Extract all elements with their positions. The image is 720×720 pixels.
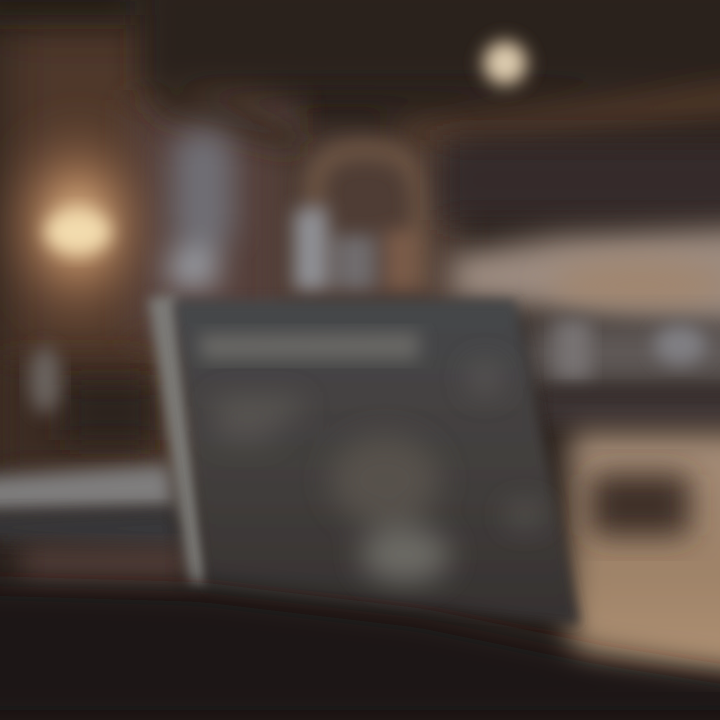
ceiling beams: [0, 0, 720, 150]
tablet: [148, 294, 580, 625]
right side scene: [440, 140, 720, 680]
blurred text lines on screen: [215, 362, 543, 583]
blurred heading on screen: [198, 332, 420, 360]
ceiling lamp: [469, 27, 541, 99]
dark wall band: [440, 140, 720, 220]
dark counter: [540, 390, 720, 426]
tan counter: [570, 432, 720, 680]
bright window band: [450, 226, 720, 335]
left desk items: [0, 346, 190, 584]
window panel behind tablet: [168, 130, 234, 288]
foreground dark desk edge: [0, 585, 720, 720]
tablet screen: [174, 300, 580, 625]
dark box: [590, 474, 690, 536]
arch and bright vertical panels: [294, 150, 420, 290]
wall lamp glow: [0, 105, 170, 345]
grey middle band: [525, 320, 720, 385]
tablet light edge: [148, 294, 210, 585]
